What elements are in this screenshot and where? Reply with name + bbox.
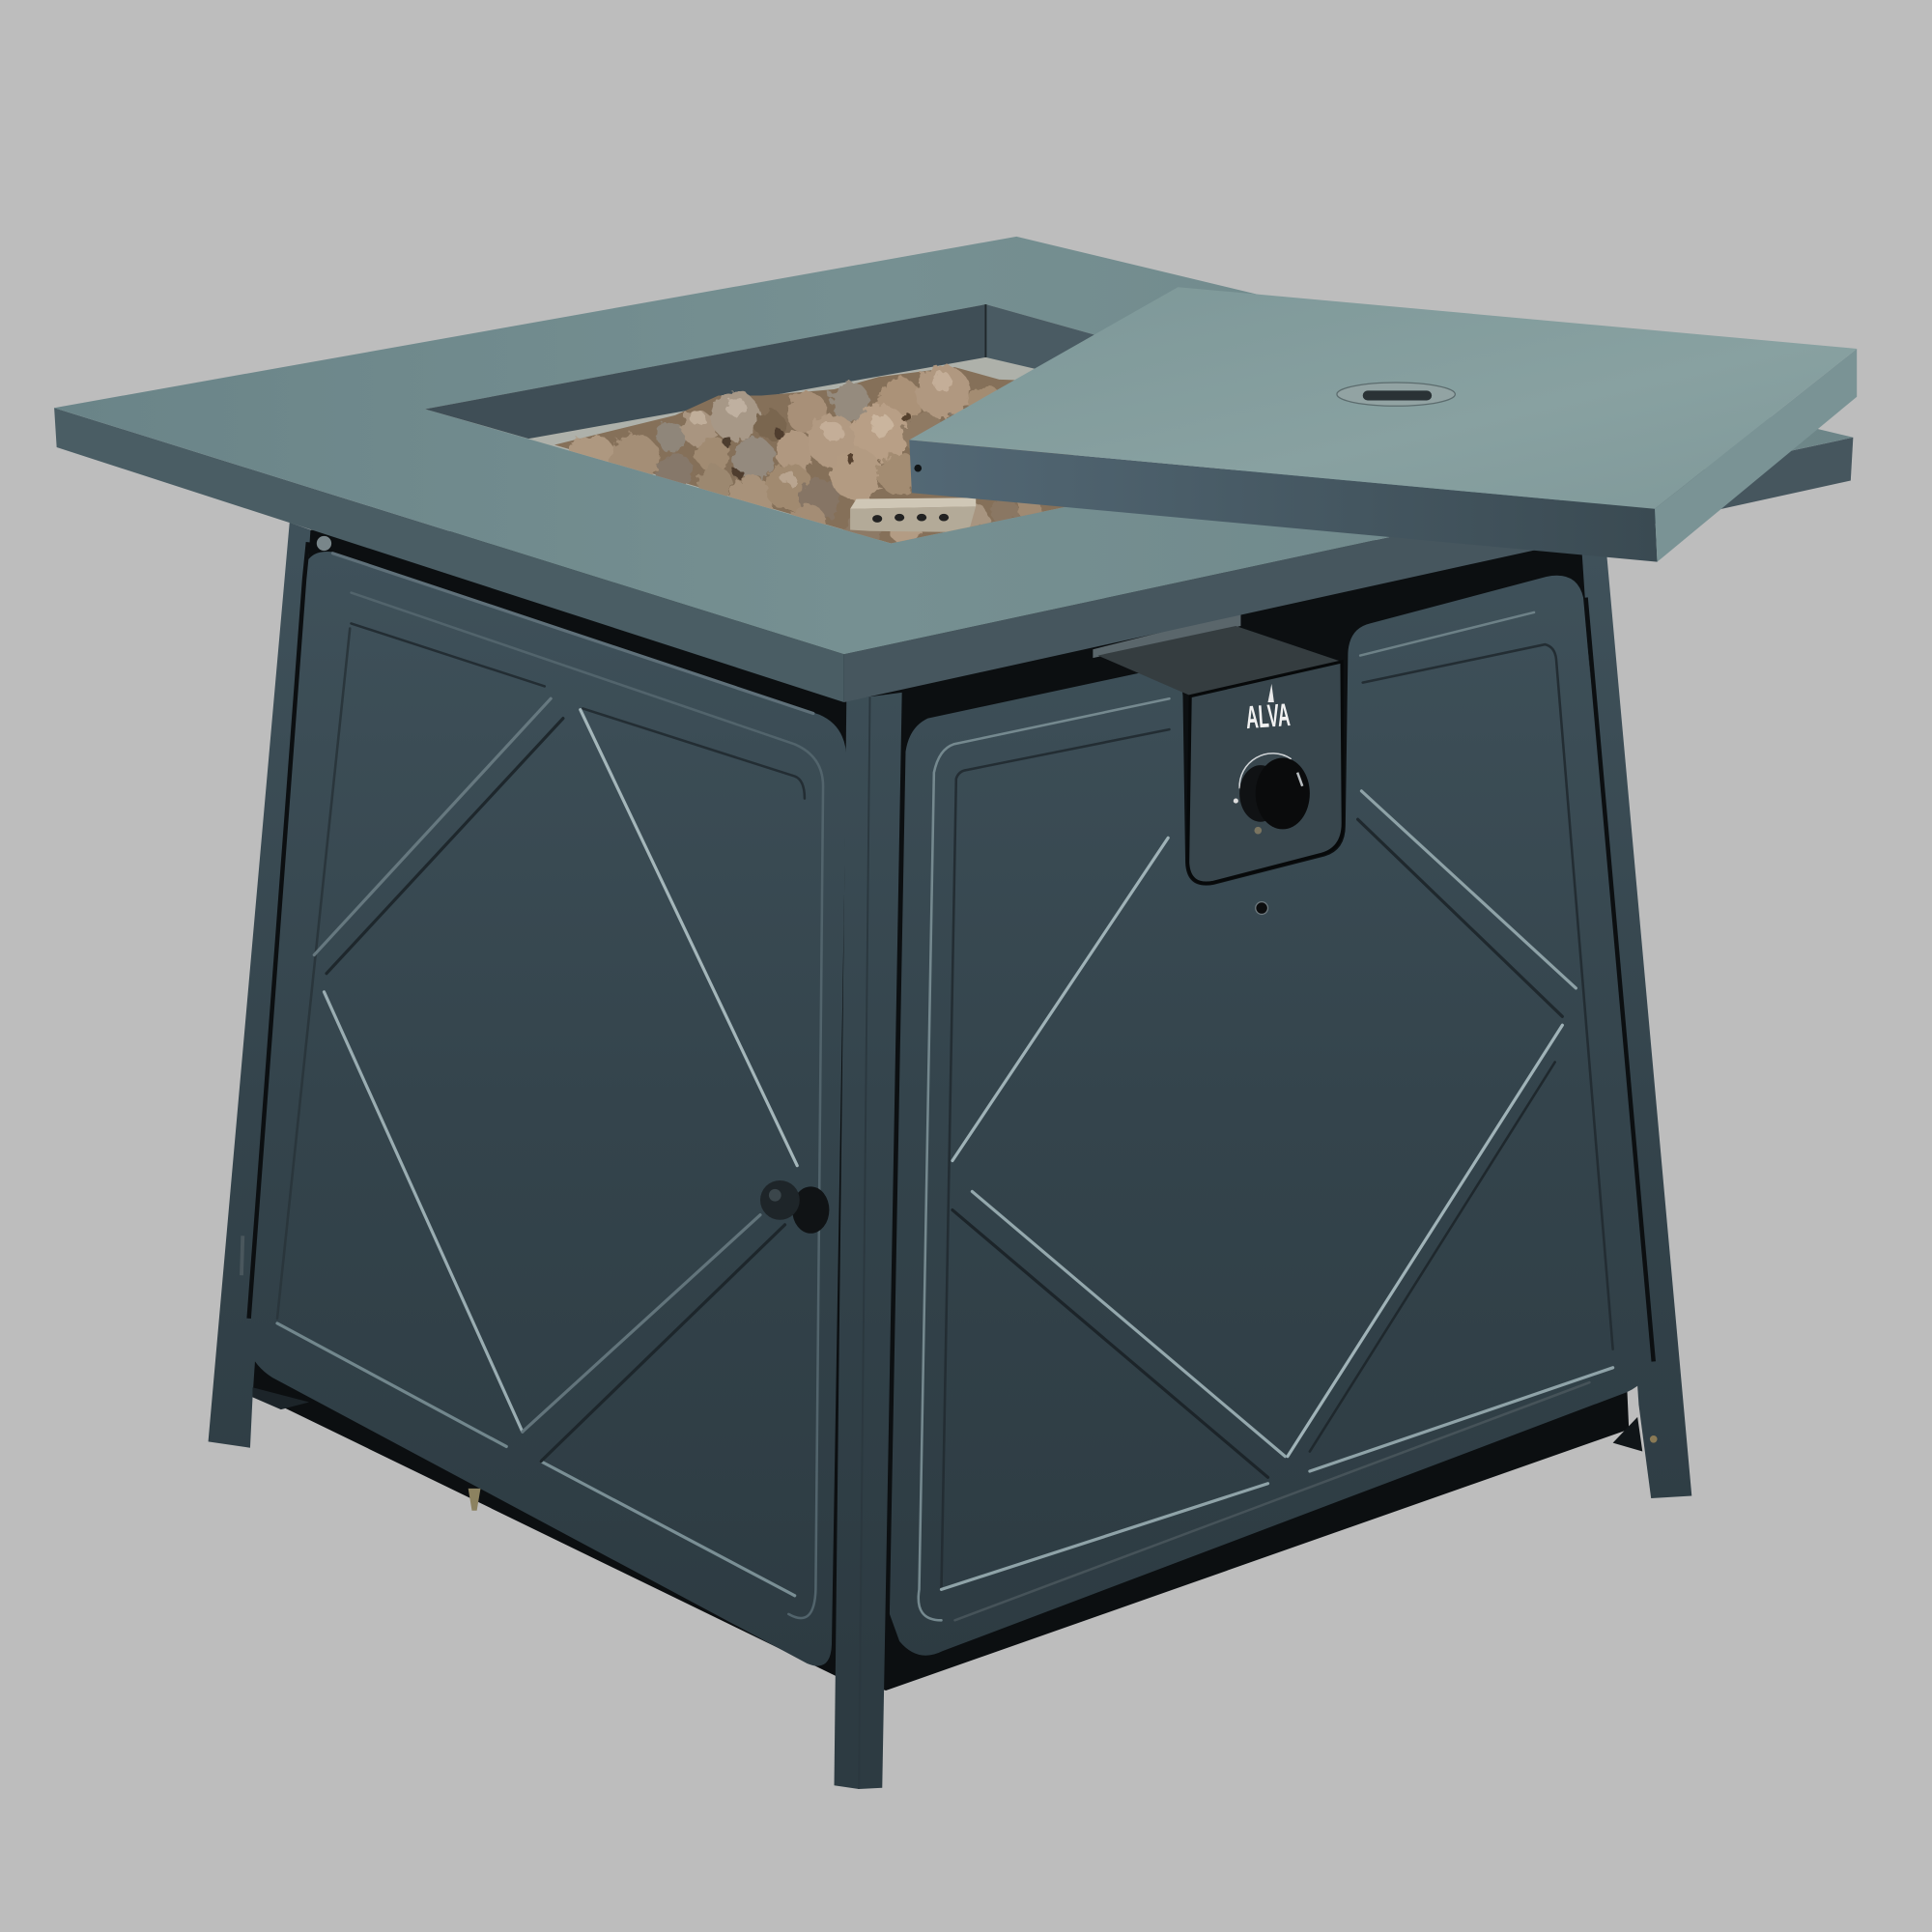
right door diamond lines <box>941 791 1613 1589</box>
control box <box>1097 626 1343 883</box>
front corner leg <box>835 693 902 1789</box>
logo text: ALVA <box>1244 697 1292 736</box>
lid handle <box>1337 383 1455 406</box>
fire pit opening <box>425 304 1238 543</box>
right door frame emboss <box>919 612 1613 1620</box>
left door frame emboss <box>277 554 823 1618</box>
left door diamond lines <box>314 698 797 1462</box>
right door gap <box>1586 598 1654 1361</box>
hinge screw <box>317 536 331 551</box>
gas fitting <box>469 1489 480 1511</box>
burner bracket <box>850 497 976 532</box>
left leg <box>209 523 310 1448</box>
bolt <box>1256 902 1267 914</box>
left door panel <box>245 536 846 1666</box>
door knob <box>760 1180 829 1234</box>
right leg <box>1582 554 1691 1498</box>
control dial <box>1234 753 1310 835</box>
lava rocks <box>554 365 1072 551</box>
burner strip <box>1093 612 1240 658</box>
cabinet shadow body <box>252 529 1629 1690</box>
left door gap <box>249 542 308 1319</box>
illustration: fire pit table <box>54 236 1857 1789</box>
sliding lid <box>909 287 1857 562</box>
table top slab <box>54 237 1853 702</box>
right door panel <box>890 576 1654 1656</box>
logo flame <box>1267 684 1274 702</box>
